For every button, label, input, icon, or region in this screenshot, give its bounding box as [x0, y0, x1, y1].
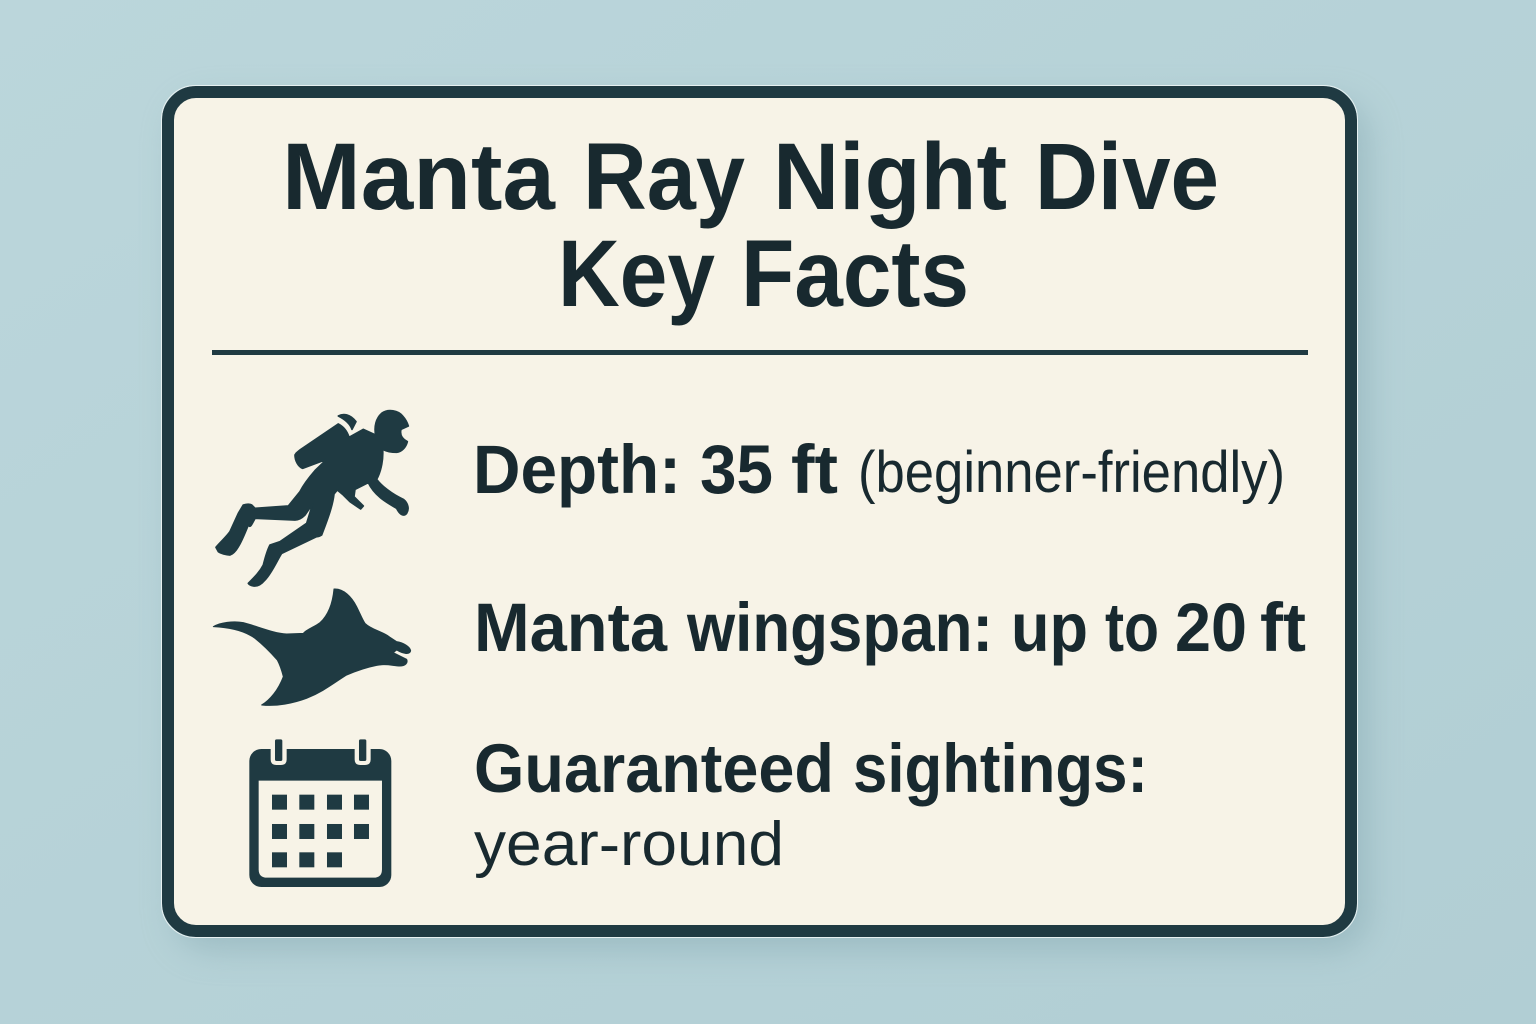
fact: guaranteed sightings: year-round	[474, 810, 784, 879]
title: Dive	[1035, 124, 1219, 230]
fact: manta wingspan: up	[1011, 589, 1088, 666]
icon: scuba diver	[216, 411, 408, 586]
fact: guaranteed sightings: sightings:	[853, 730, 1148, 807]
title: Facts	[741, 221, 969, 327]
fact: depth	[473, 431, 1285, 508]
fact: manta wingspan: ft	[1260, 589, 1306, 666]
fact: manta wingspan: wingspan:	[686, 589, 993, 666]
fact: guaranteed sightings: Guaranteed	[474, 730, 834, 807]
panel: key facts card	[162, 86, 1358, 938]
icon: manta ray	[213, 589, 411, 705]
fact: guaranteed sightings	[474, 730, 1148, 879]
fact: depth: ft	[791, 431, 838, 508]
title: Ray	[583, 124, 745, 230]
card frame	[168, 92, 1351, 931]
fact: manta wingspan: Manta	[474, 589, 668, 666]
fact: manta wingspan: 20	[1175, 589, 1247, 666]
title: Night	[773, 124, 1007, 230]
fact: manta wingspan	[474, 589, 1306, 666]
fact: depth: 35	[700, 431, 773, 508]
title: Key	[558, 221, 715, 327]
card shadow	[174, 100, 1369, 951]
title	[282, 124, 1219, 327]
fact: depth: Depth:	[473, 431, 681, 508]
fact: manta wingspan: to	[1105, 589, 1159, 666]
icon: calendar	[249, 739, 391, 887]
title: Manta	[282, 124, 556, 230]
fact: depth: (beginner-friendly)	[858, 440, 1285, 505]
